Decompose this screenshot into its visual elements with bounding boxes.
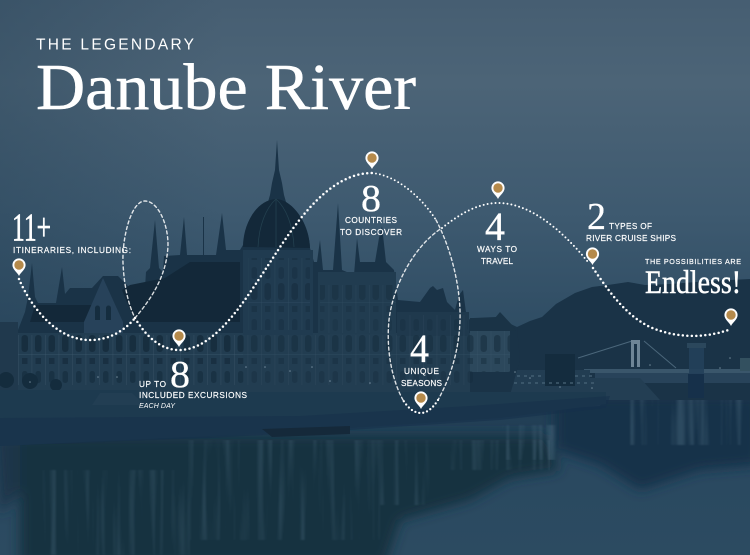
window rows [18, 335, 243, 385]
main silhouette [18, 140, 520, 395]
stat: 4 ways to travel: WAYS TO [477, 245, 517, 254]
title: THE LEGENDARY [36, 36, 194, 54]
stat: 2 types of ships: 2 [587, 196, 606, 238]
embankment foreground [0, 390, 610, 446]
hill on the right bank [505, 279, 750, 400]
pale wing [470, 330, 510, 372]
closing: endless possibilities: THE POSSIBILITIES ARE [645, 257, 741, 266]
gable [84, 278, 123, 333]
stat: 2 types of ships [586, 196, 677, 243]
stat: 4 ways to travel [477, 204, 517, 266]
stat: 11+ itineraries [12, 206, 131, 255]
city lights [29, 357, 731, 389]
map pins [12, 151, 738, 409]
stat: 4 unique seasons: 4 [410, 326, 429, 371]
stat: 4 ways to travel: 4 [485, 204, 505, 249]
chain bridge [578, 340, 750, 398]
stat: 2 types of ships: TYPES OF [609, 222, 652, 231]
left annex [0, 322, 18, 392]
stat: 8 countries: COUNTRIES [345, 216, 398, 225]
stat: up to 8 excursions: UP TO [139, 380, 166, 389]
stat: 8 countries: TO DISCOVER [340, 228, 402, 237]
facade shade [18, 333, 470, 398]
stat: up to 8 excursions: 8 [170, 354, 190, 396]
embankment on the right [470, 354, 660, 414]
stat: 8 countries: 8 [361, 178, 381, 220]
stat: up to 8 excursions [139, 354, 248, 410]
stat: 4 unique seasons [401, 326, 443, 388]
trees [0, 372, 62, 391]
roofs [30, 262, 240, 322]
stat: 4 unique seasons: UNIQUE [404, 367, 440, 376]
stat: up to 8 excursions: INCLUDED EXCURSIONS [139, 391, 248, 400]
stat: 4 ways to travel: TRAVEL [481, 257, 513, 266]
parliament building silhouette [0, 140, 520, 398]
stat: 8 countries [340, 178, 402, 237]
stat: 2 types of ships: RIVER CRUISE SHIPS [586, 234, 677, 243]
route line: dotted and dashed river path [19, 173, 731, 413]
stat: 11+ itineraries: ITINERARIES, INCLUDING: [13, 246, 131, 255]
stat: 4 unique seasons: SEASONS [401, 379, 443, 388]
stat: up to 8 excursions: EACH DAY [139, 403, 176, 410]
dome [243, 199, 310, 248]
stat: 11+ itineraries: 11+ [12, 206, 51, 249]
gable windows [95, 306, 111, 320]
title: Danube River [36, 51, 416, 124]
river water and reflections [0, 385, 750, 555]
